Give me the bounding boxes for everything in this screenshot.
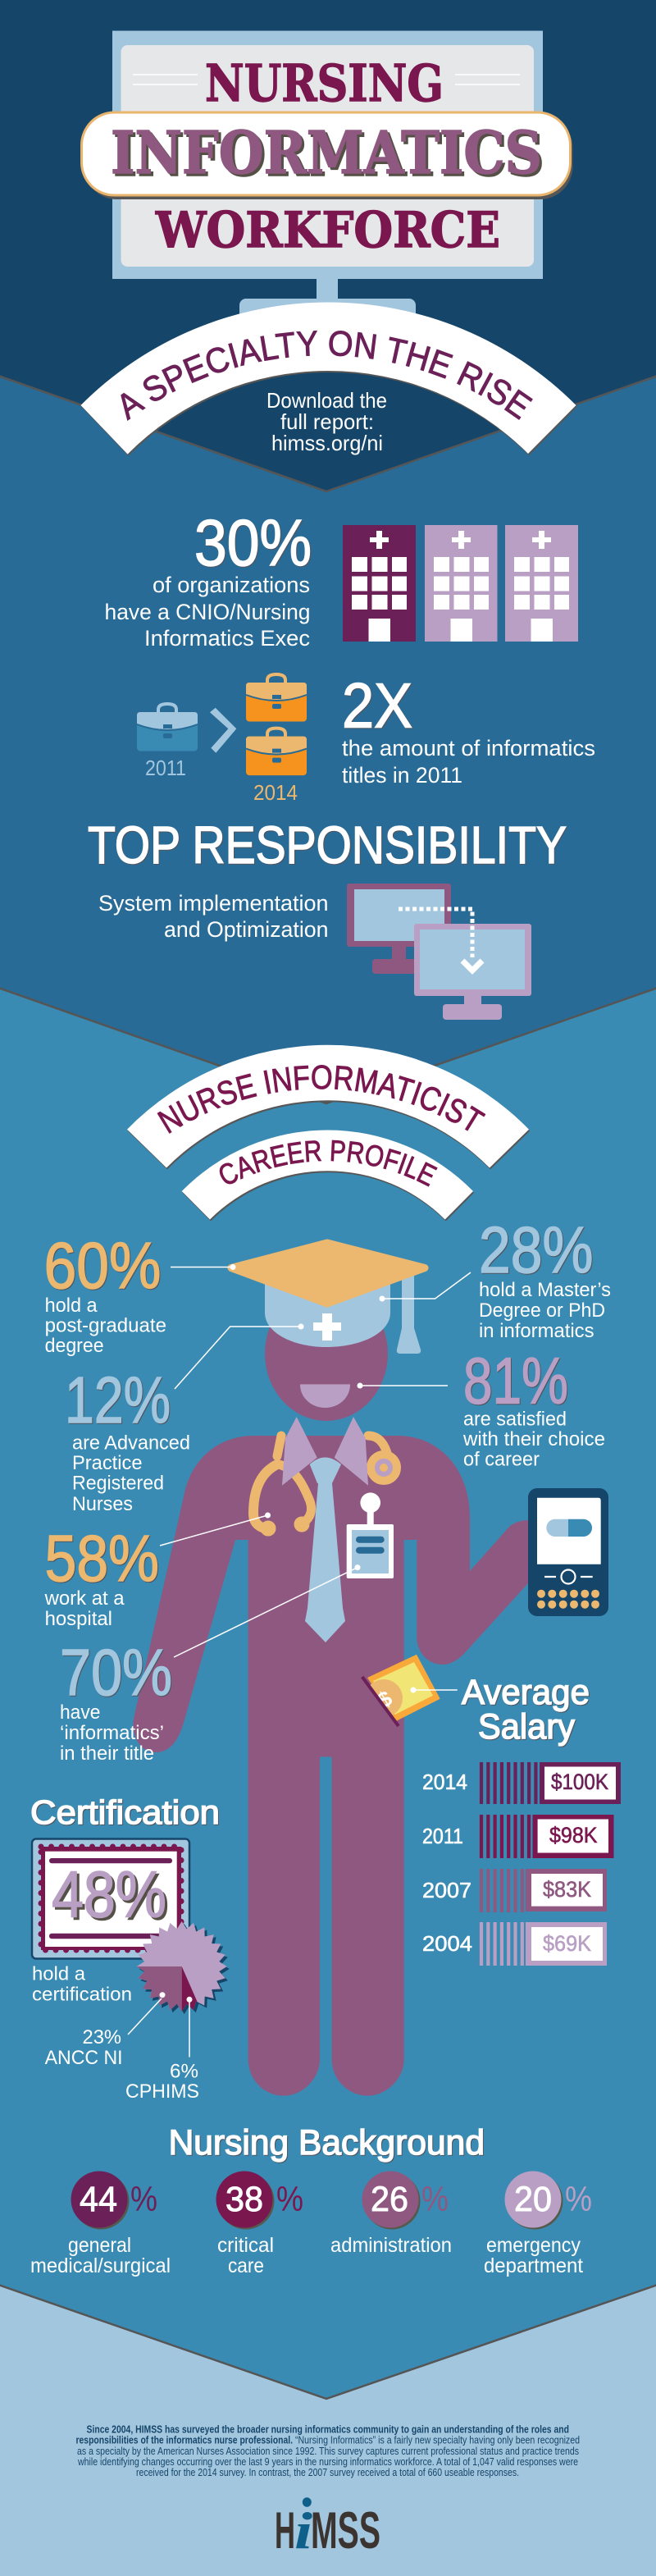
stat: 12 percent: Nurses	[72, 1493, 133, 1515]
stat: 28 percent: hold a Master’s	[479, 1279, 611, 1301]
stat: 12 percent: Practice	[72, 1452, 143, 1474]
stat: 28 percent: in informatics	[479, 1320, 594, 1342]
stat: 2X: the amount of informatics	[342, 736, 595, 760]
logo: HIMSS: MSS	[311, 2502, 380, 2560]
text block: about the survey: Since 2004, HIMSS has surveyed the broader nursing informatics community to gain an understanding of the roles and	[87, 2424, 569, 2436]
stat: 81 percent: of career	[463, 1449, 540, 1470]
label: 2014: 2014	[253, 780, 298, 805]
callout line: 58 percent	[160, 1513, 271, 1546]
stat: 44 percent general medical/surgical: medical/surgical	[30, 2254, 171, 2277]
graduation cap	[231, 1243, 425, 1354]
stat: 44 percent general medical/surgical	[30, 2171, 171, 2277]
text: hold a certification	[32, 1963, 132, 2005]
stat: 2X	[342, 671, 595, 788]
stat: 12 percent	[65, 1363, 190, 1515]
title: Nursing: NURSING	[205, 53, 444, 113]
stat: 28 percent: Degree or PhD	[479, 1299, 605, 1322]
download text: full report:	[280, 409, 374, 434]
heading: certification: Certification	[30, 1793, 220, 1831]
stat: 58 percent: work at a	[44, 1587, 125, 1610]
text block: about the survey: responsibilities of the informatics nurse professional.	[75, 2435, 293, 2446]
stat: 20 percent emergency department: %	[565, 2180, 592, 2219]
text: hold a certification: certification	[32, 1984, 132, 2005]
callout line: 60 percent	[171, 1264, 236, 1270]
heading: average salary: Salary	[478, 1707, 575, 1747]
stat: 44 percent general medical/surgical: %	[130, 2180, 157, 2219]
stat: 12 percent: Registered	[72, 1472, 164, 1495]
callout: 23 percent ANCC NI: ANCC NI	[45, 2047, 123, 2069]
mouth	[300, 1384, 350, 1408]
banner: career profile: CAREER PROFILE	[220, 1140, 438, 1187]
callout: 6 percent CPHIMS	[125, 1997, 199, 2103]
stat: 70 percent: ‘informatics’	[60, 1722, 164, 1744]
banner: career profile	[182, 1130, 474, 1221]
banner: a specialty on the rise	[80, 302, 577, 456]
callout: 6 percent CPHIMS: 6%	[170, 2061, 198, 2082]
certificate	[32, 1839, 189, 1959]
callout line: 81 percent	[358, 1383, 448, 1388]
stat: 60 percent: degree	[45, 1335, 104, 1357]
banner: nurse informaticist: NURSE INFORMATICIST	[157, 1065, 485, 1134]
icon: briefcase 2011	[137, 704, 198, 751]
stat: 30 percent: 30%	[194, 506, 312, 579]
callout line: 28 percent	[379, 1272, 471, 1301]
stat: 12 percent: 12%	[65, 1363, 171, 1436]
salary row: 2014	[422, 1762, 621, 1804]
stat: 12 percent: are Advanced	[72, 1432, 190, 1454]
stat: 2X: titles in 2011	[342, 763, 462, 788]
icon: hospital dark	[343, 525, 416, 642]
download text	[266, 388, 387, 455]
chart: certification starburst pie	[136, 1921, 230, 2014]
body	[133, 1436, 528, 2096]
stat: 26 percent administration: 26	[371, 2180, 408, 2219]
stat: 58 percent: 58%	[45, 1522, 159, 1595]
logo: HIMSS: H	[275, 2502, 295, 2560]
heading: top responsibility: TOP RESPONSIBILITY	[88, 815, 567, 875]
icon: hospital light two	[505, 525, 578, 642]
figure: nurse informaticist person	[133, 1243, 528, 2096]
stat: 70 percent: 70%	[60, 1636, 172, 1709]
callout: 23 percent ANCC NI: 23%	[82, 2026, 121, 2048]
salary row: 2004: 2004	[422, 1931, 472, 1956]
stat: 26 percent administration: %	[421, 2180, 449, 2219]
download text: himss.org/ni	[271, 431, 383, 455]
icon: briefcase 2014 top	[246, 674, 307, 722]
collar and tie	[282, 1417, 368, 1642]
label: 2011: 2011	[145, 756, 186, 780]
stat: 38 percent critical care: care	[228, 2254, 264, 2277]
heading: nursing background: Nursing Background	[169, 2123, 485, 2163]
stat: 81 percent: with their choice	[462, 1428, 605, 1450]
stat: 81 percent: are satisfied	[463, 1408, 567, 1430]
head	[265, 1286, 388, 1421]
title sign	[82, 31, 572, 331]
stat: 81 percent	[462, 1345, 605, 1470]
callout line: 70 percent	[174, 1564, 361, 1657]
text: hold a certification: hold a	[32, 1963, 85, 1985]
stat: 38 percent critical care: critical	[217, 2234, 274, 2257]
text block: about the survey: received for the 2014 survey. In contrast, the 2007 survey received a total of 660 useable responses.	[136, 2467, 519, 2478]
text block: about the survey: as a specialty by the American Nurses Association since 1992. This survey captures current professional status and practice trends	[77, 2446, 579, 2457]
stat: 44 percent general medical/surgical: 44	[80, 2180, 117, 2219]
callout line: salary	[410, 1687, 458, 1693]
stat: 26 percent administration	[330, 2171, 452, 2257]
icon: money in pocket: $	[373, 1686, 396, 1713]
salary row: 2007	[422, 1869, 607, 1912]
stat: 60 percent: 60%	[44, 1229, 161, 1302]
salary row: 2007: $83K	[543, 1877, 591, 1902]
stat: 20 percent emergency department: emergency	[486, 2234, 581, 2257]
stat: 2X: 2X	[342, 671, 412, 742]
stat: 44 percent general medical/surgical: general	[68, 2234, 131, 2257]
id badge	[347, 1492, 394, 1578]
stat: 20 percent emergency department: 20	[514, 2180, 552, 2219]
salary row: 2007: 2007	[422, 1878, 472, 1902]
stat: 20 percent emergency department	[484, 2171, 592, 2277]
salary row: 2011	[422, 1815, 613, 1858]
stat: 20 percent emergency department: department	[484, 2254, 583, 2277]
title: Workforce: WORKFORCE	[155, 202, 500, 259]
text: system implementation	[98, 891, 328, 942]
heading: average salary: Average	[462, 1673, 590, 1712]
stat: 70 percent: in their title	[60, 1742, 154, 1765]
stat: 26 percent administration: administration	[330, 2234, 452, 2257]
stethoscope	[253, 1436, 400, 1535]
banner: nurse informaticist	[127, 1045, 530, 1170]
stat: 30 percent	[105, 506, 312, 651]
stat: 28 percent: 28%	[479, 1213, 594, 1286]
stat: 38 percent critical care: %	[276, 2180, 303, 2219]
callout line: 12 percent	[175, 1324, 303, 1389]
stat: 30 percent: of organizations	[153, 573, 310, 597]
callout: 6 percent CPHIMS: CPHIMS	[125, 2080, 199, 2103]
text block: about the survey: “Nursing Informatics” is a fairly new specialty having only been recognized	[295, 2435, 580, 2446]
download text: Download the	[266, 388, 387, 413]
heading: average salary	[462, 1673, 590, 1747]
salary row: 2011: $98K	[549, 1823, 597, 1848]
salary row: 2014: 2014	[422, 1770, 467, 1794]
stat: 58 percent	[44, 1522, 159, 1630]
logo: HIMSS: i	[294, 2501, 312, 2560]
stat: 30 percent: Informatics Exec	[144, 626, 310, 651]
icon: smartphone	[528, 1488, 608, 1616]
text: system implementation: and Optimization	[164, 917, 328, 942]
stat: 60 percent	[44, 1229, 166, 1357]
stat: 70 percent	[60, 1636, 172, 1765]
text block: about the survey: while identifying changes occurring over the last 9 years in the nursing informatics workforce. A total of 1,047 valid responses were	[77, 2456, 578, 2468]
logo: HIMSS	[275, 2497, 380, 2560]
title pill: Informatics: INFORMATICS	[111, 118, 542, 187]
stat: 38 percent critical care	[216, 2171, 303, 2277]
certificate: 48%	[52, 1857, 166, 1931]
salary row: 2011: 2011	[422, 1824, 463, 1848]
text: system implementation: System implementation	[98, 891, 328, 916]
salary row: 2004: $69K	[543, 1931, 591, 1956]
stat: 81 percent: 81%	[463, 1345, 568, 1418]
stat: 60 percent: post-graduate	[45, 1315, 166, 1337]
icon: hospital light one	[425, 525, 497, 642]
salary row: 2014: $100K	[551, 1770, 608, 1794]
banner: a specialty on the rise: A SPECIALTY ON THE RISE	[121, 330, 533, 421]
salary row: 2004	[422, 1922, 607, 1966]
stat: 38 percent critical care: 38	[226, 2180, 263, 2219]
icon: monitors	[347, 884, 531, 1020]
arrow: chevron	[210, 708, 236, 753]
icon: briefcase 2014 bottom	[246, 728, 307, 775]
callout: 23 percent ANCC NI	[45, 1992, 165, 2069]
icon: money in pocket	[362, 1655, 440, 1726]
stat: 30 percent: have a CNIO/Nursing	[105, 600, 310, 624]
stat: 60 percent: hold a	[45, 1295, 98, 1317]
stat: 28 percent	[479, 1213, 611, 1342]
stat: 58 percent: hospital	[45, 1608, 112, 1630]
stat: 70 percent: have	[60, 1701, 100, 1724]
text block: about the survey	[75, 2424, 580, 2478]
